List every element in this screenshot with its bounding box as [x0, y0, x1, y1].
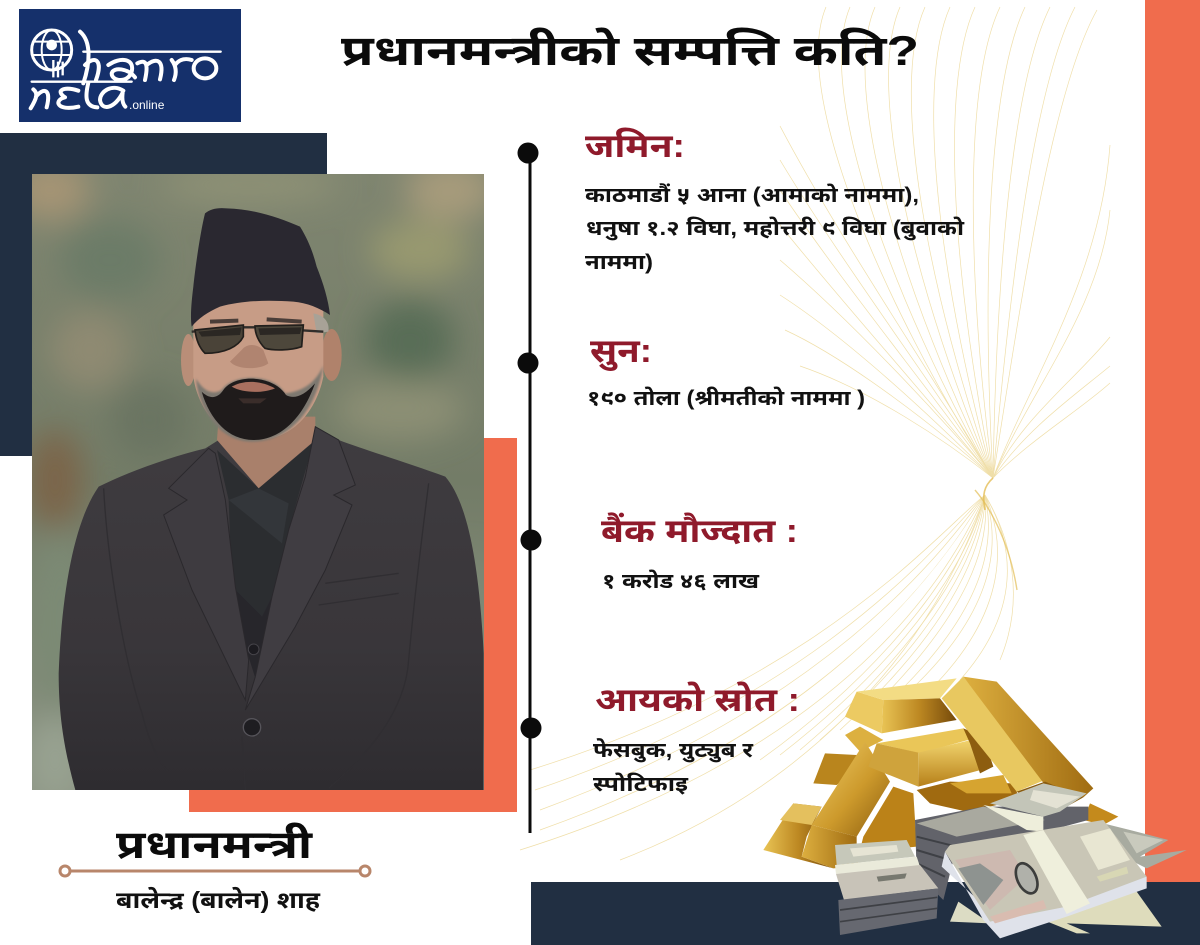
title: प्रधानमन्त्रीको सम्पत्ति कति?	[341, 27, 919, 74]
panel: right orange band	[1145, 0, 1200, 882]
section: gold	[587, 332, 865, 410]
section: bank balance: १ करोड ४६ लाख	[602, 569, 760, 593]
logo domain text: .online	[129, 98, 165, 112]
timeline	[518, 142, 542, 833]
section: land: नाममा)	[585, 251, 653, 274]
decorative gold wave lines	[520, 7, 1110, 860]
section: source of income: आयको स्रोत :	[595, 681, 800, 718]
dhaka topi	[191, 208, 330, 327]
section: gold: १९० तोला (श्रीमतीको नाममा )	[587, 386, 865, 410]
section: source of income	[593, 681, 800, 796]
logo wordmark	[31, 32, 221, 108]
section: gold: सुन:	[590, 332, 652, 372]
section: bank balance: बैंक मौज्दात :	[601, 512, 798, 549]
divider with end circles	[60, 866, 370, 876]
sunglasses	[192, 325, 323, 353]
section: land: जमिन:	[585, 127, 685, 164]
section: source of income: फेसबुक, युट्युब र	[593, 738, 754, 763]
timeline dot 4	[520, 718, 542, 738]
logo: hamro neta online	[19, 9, 241, 122]
section: source of income: स्पोटिफाइ	[593, 772, 689, 796]
gold bars	[763, 677, 1118, 868]
timeline dot 3	[520, 530, 542, 550]
icon: globe	[32, 30, 72, 77]
timeline dot 1	[518, 142, 538, 164]
banknote bundles	[835, 783, 1187, 938]
head	[181, 208, 342, 442]
section: bank balance	[601, 512, 798, 593]
panel: orange backing block	[189, 438, 517, 812]
photo: prime minister portrait	[32, 174, 484, 790]
panel: navy backing block	[0, 133, 327, 456]
name: बालेन्द्र (बालेन) शाह	[116, 887, 321, 913]
panel: bottom navy band	[531, 882, 1200, 945]
section: land	[585, 127, 965, 274]
section: land: काठमाडौं ५ आना (आमाको नाममा),	[585, 183, 919, 207]
illustration: gold bars and banknotes	[763, 677, 1187, 938]
section: land: धनुषा १.२ विघा, महोत्तरी ९ विघा (बुवाको	[586, 216, 965, 241]
heading: prime minister: प्रधानमन्त्री	[116, 823, 314, 867]
suit and shirt	[59, 417, 484, 790]
timeline dot 2	[518, 352, 538, 374]
